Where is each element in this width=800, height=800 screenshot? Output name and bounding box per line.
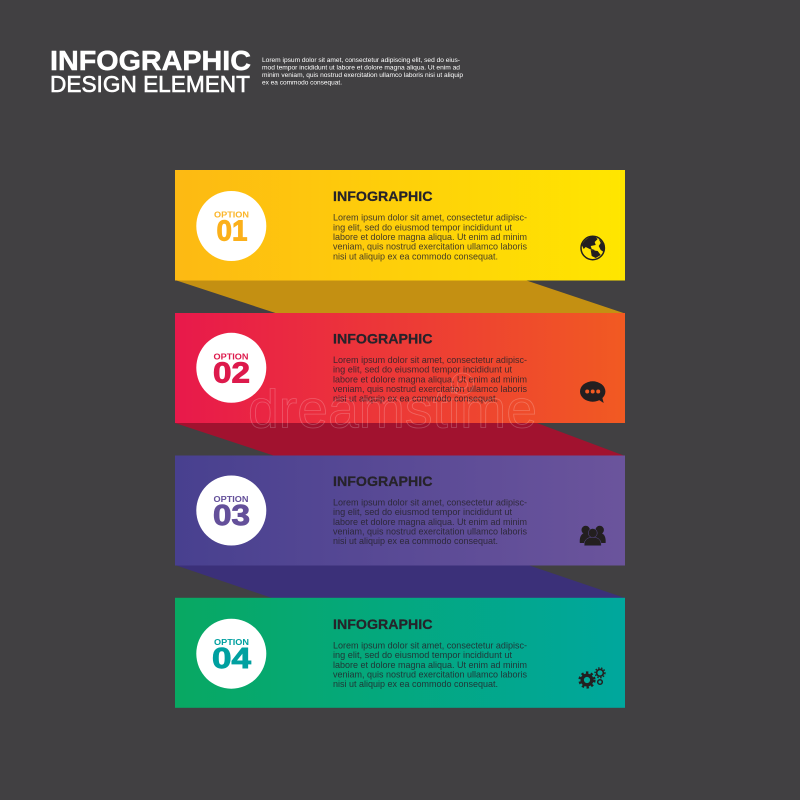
watermark: dreamstime — [248, 380, 537, 440]
panel: option 04 — [175, 598, 625, 708]
icon: gears — [580, 668, 605, 687]
body text 01: nisi ut aliquip ex ea commodo consequat. — [333, 251, 498, 261]
body text 04 — [333, 640, 527, 689]
badge 03 — [196, 476, 266, 546]
badge 03: OPTION — [214, 495, 249, 504]
body text 02: veniam, quis nostrud exercitation ullamco laboris — [333, 384, 527, 394]
band 01 — [175, 170, 625, 280]
body text 04: labore et dolore magna aliqua. Ut enim ad minim — [333, 660, 527, 670]
body text 04: ing elit, sed do eiusmod tempor incididunt ut — [333, 650, 512, 660]
badge 04 — [196, 619, 266, 689]
header description: mod tempor incididunt ut labore et dolore magna aliqua. Ut enim ad — [262, 64, 461, 72]
band 04 — [175, 598, 625, 708]
badge 01 — [196, 191, 266, 261]
panel: option 01 — [175, 170, 625, 280]
body text 04: nisi ut aliquip ex ea commodo consequat. — [333, 679, 498, 689]
body text 03: veniam, quis nostrud exercitation ullamco laboris — [333, 526, 527, 536]
badge 04: 04 — [212, 643, 251, 675]
body text 01: ing elit, sed do eiusmod tempor incididunt ut — [333, 222, 512, 232]
fold shadow: red to purple — [175, 423, 625, 456]
body text 04: veniam, quis nostrud exercitation ullamco laboris — [333, 670, 527, 680]
header description: ex ea commodo consequat. — [262, 80, 342, 86]
body text 04: Lorem ipsum dolor sit amet, consectetur adipisc- — [333, 640, 527, 650]
band 03 — [175, 456, 625, 566]
body text 02: nisi ut aliquip ex ea commodo consequat. — [333, 394, 498, 404]
icon: chat bubble — [580, 381, 605, 403]
icon: people — [580, 526, 606, 546]
title — [50, 45, 251, 97]
body text 03: nisi ut aliquip ex ea commodo consequat. — [333, 536, 498, 546]
panel: option 03 — [175, 456, 625, 566]
heading 04: INFOGRAPHIC — [333, 616, 432, 632]
badge 03: 03 — [213, 500, 250, 532]
badge 01: OPTION — [214, 210, 249, 219]
body text 02: Lorem ipsum dolor sit amet, consectetur adipisc- — [333, 355, 527, 365]
badge 02 — [196, 333, 266, 403]
body text 03: labore et dolore magna aliqua. Ut enim ad minim — [333, 517, 527, 527]
badge 02: 02 — [213, 357, 250, 389]
header description: Lorem ipsum dolor sit amet, consectetur adipiscing elit, sed do eius- — [262, 57, 460, 64]
badge 04: OPTION — [214, 638, 249, 647]
title: DESIGN ELEMENT — [50, 71, 250, 97]
fold shadow: purple to green — [175, 565, 625, 598]
body text 01 — [333, 213, 527, 261]
body text 01: Lorem ipsum dolor sit amet, consectetur adipisc- — [333, 213, 527, 223]
body text 03: ing elit, sed do eiusmod tempor incididunt ut — [333, 507, 512, 517]
heading 02: INFOGRAPHIC — [333, 330, 432, 346]
band 02 — [175, 313, 625, 423]
body text 03: Lorem ipsum dolor sit amet, consectetur adipisc- — [333, 498, 527, 508]
body text 01: labore et dolore magna aliqua. Ut enim ad minim — [333, 232, 527, 242]
body text 02 — [333, 355, 527, 404]
header description: minim veniam, quis nostrud exercitation ullamco laboris nisi ut aliquip — [262, 72, 464, 79]
badge 02: OPTION — [214, 352, 249, 362]
fold shadow: yellow to red — [175, 280, 625, 314]
header description — [262, 57, 464, 86]
icon: globe — [581, 236, 604, 260]
badge 01: 01 — [216, 216, 248, 248]
body text 03 — [333, 498, 527, 546]
title: INFOGRAPHIC — [50, 45, 251, 76]
heading 01: INFOGRAPHIC — [333, 188, 432, 204]
panel: option 02 — [175, 313, 625, 423]
heading 03: INFOGRAPHIC — [333, 473, 432, 489]
body text 02: labore et dolore magna aliqua. Ut enim ad minim — [333, 374, 527, 384]
body text 01: veniam, quis nostrud exercitation ullamco laboris — [333, 242, 527, 252]
body text 02: ing elit, sed do eiusmod tempor incididunt ut — [333, 365, 512, 375]
